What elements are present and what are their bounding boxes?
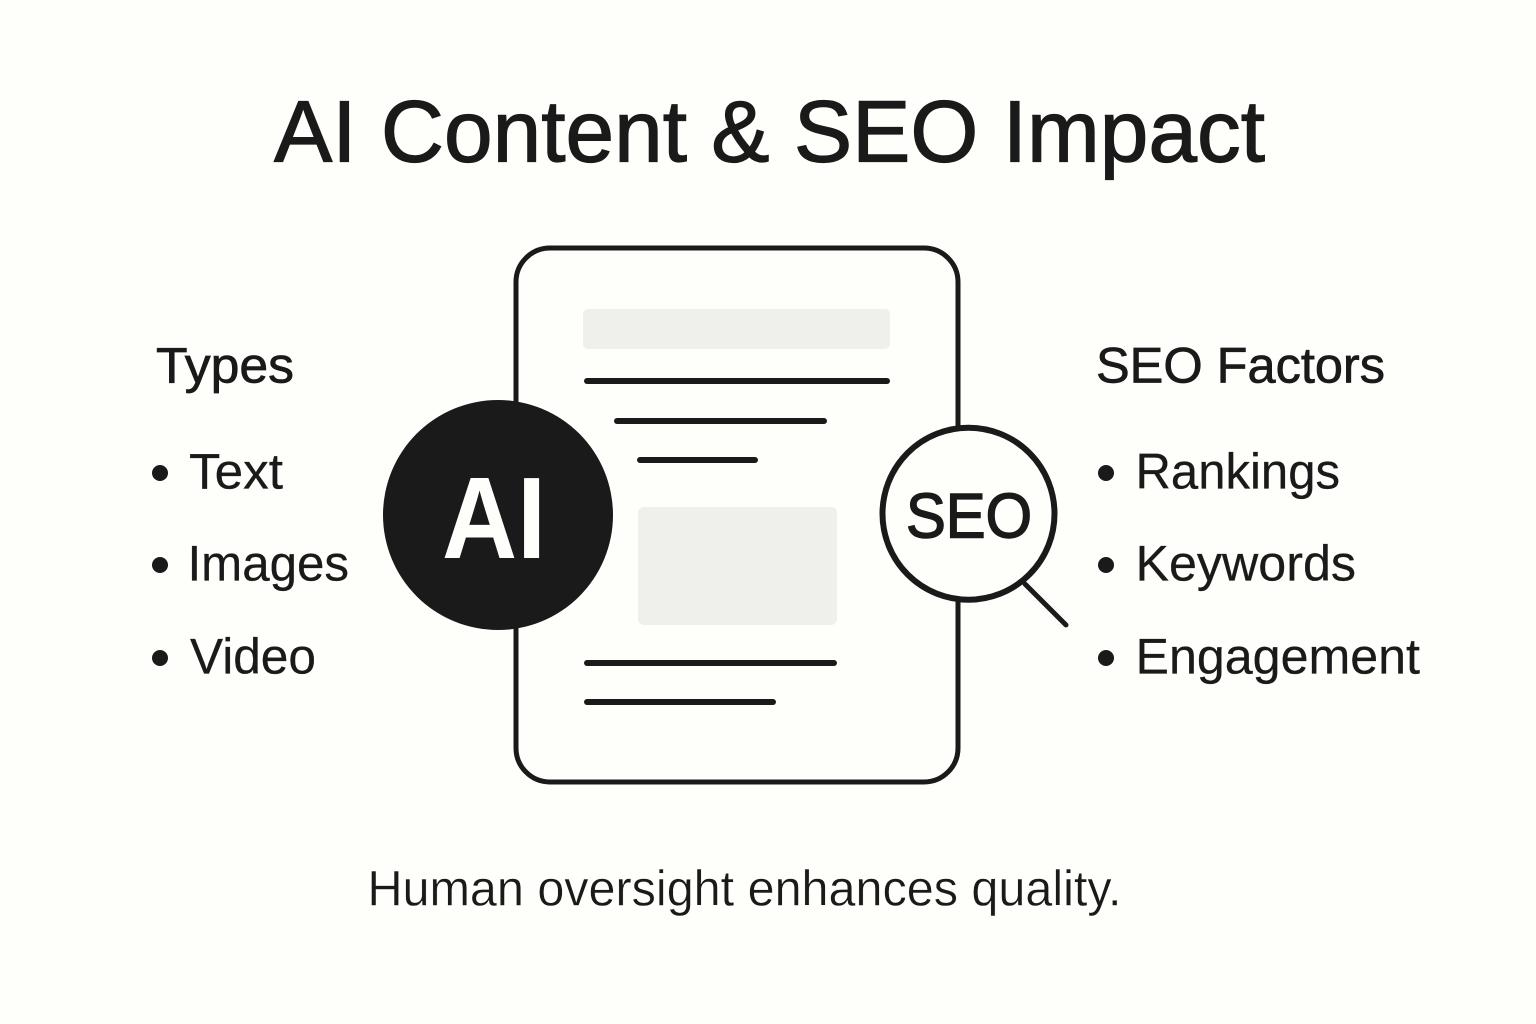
heading: types: Types [156, 338, 294, 394]
panel: types list [152, 338, 349, 684]
text line 4 [584, 660, 837, 666]
list item: text [152, 444, 283, 500]
list item: images: Images [188, 536, 349, 592]
footer caption: Human oversight enhances quality. [368, 860, 1122, 916]
list item: engagement: Engagement [1136, 628, 1420, 684]
text line 5 [584, 699, 776, 705]
text line 2 [614, 418, 827, 424]
heading: seo factors: SEO Factors [1096, 338, 1385, 394]
icon: AI badge [383, 400, 613, 630]
icon: SEO magnifying glass [882, 428, 1066, 625]
document outline [516, 248, 958, 782]
icon: AI badge: AI [442, 453, 546, 583]
text line 3 [637, 457, 758, 463]
list item: rankings: Rankings [1136, 444, 1340, 500]
icon: SEO magnifying glass: SEO [906, 482, 1032, 552]
image placeholder [638, 507, 837, 625]
text line 1 [584, 378, 890, 384]
panel: seo factors list [1096, 338, 1420, 684]
list item: text: Text [189, 444, 283, 500]
title: AI Content & SEO Impact [274, 84, 1265, 180]
header placeholder [583, 309, 890, 349]
list item: video: Video [190, 628, 316, 684]
list item: keywords: Keywords [1136, 536, 1356, 592]
panel: document [516, 248, 958, 782]
